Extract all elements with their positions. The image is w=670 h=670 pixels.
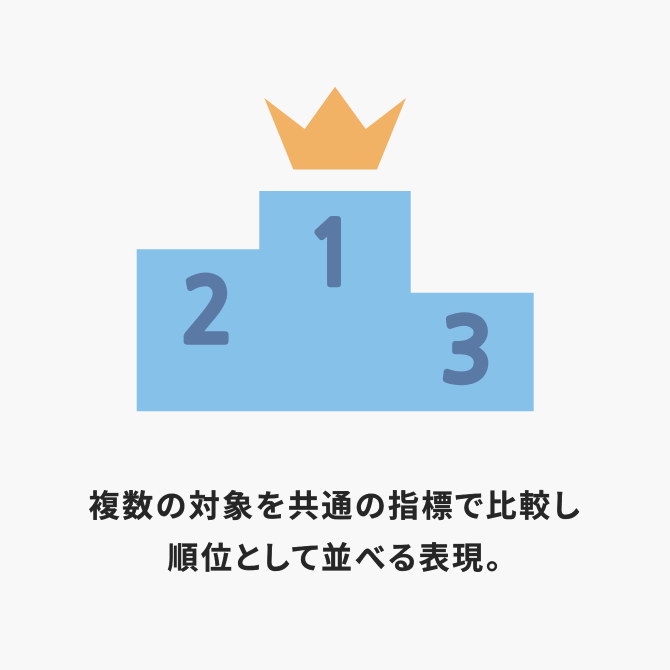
- number 2: 2: [181, 269, 234, 356]
- caption line 2: 順位として並べる表現。: [167, 541, 504, 576]
- icon: crown: [264, 87, 406, 170]
- number 3: 3: [440, 309, 493, 396]
- podium: [137, 191, 534, 411]
- caption: [89, 489, 582, 576]
- number 1: 1: [305, 212, 359, 298]
- podium blocks: [137, 191, 534, 411]
- caption line 1: 複数の対象を共通の指標で比較し: [89, 489, 582, 524]
